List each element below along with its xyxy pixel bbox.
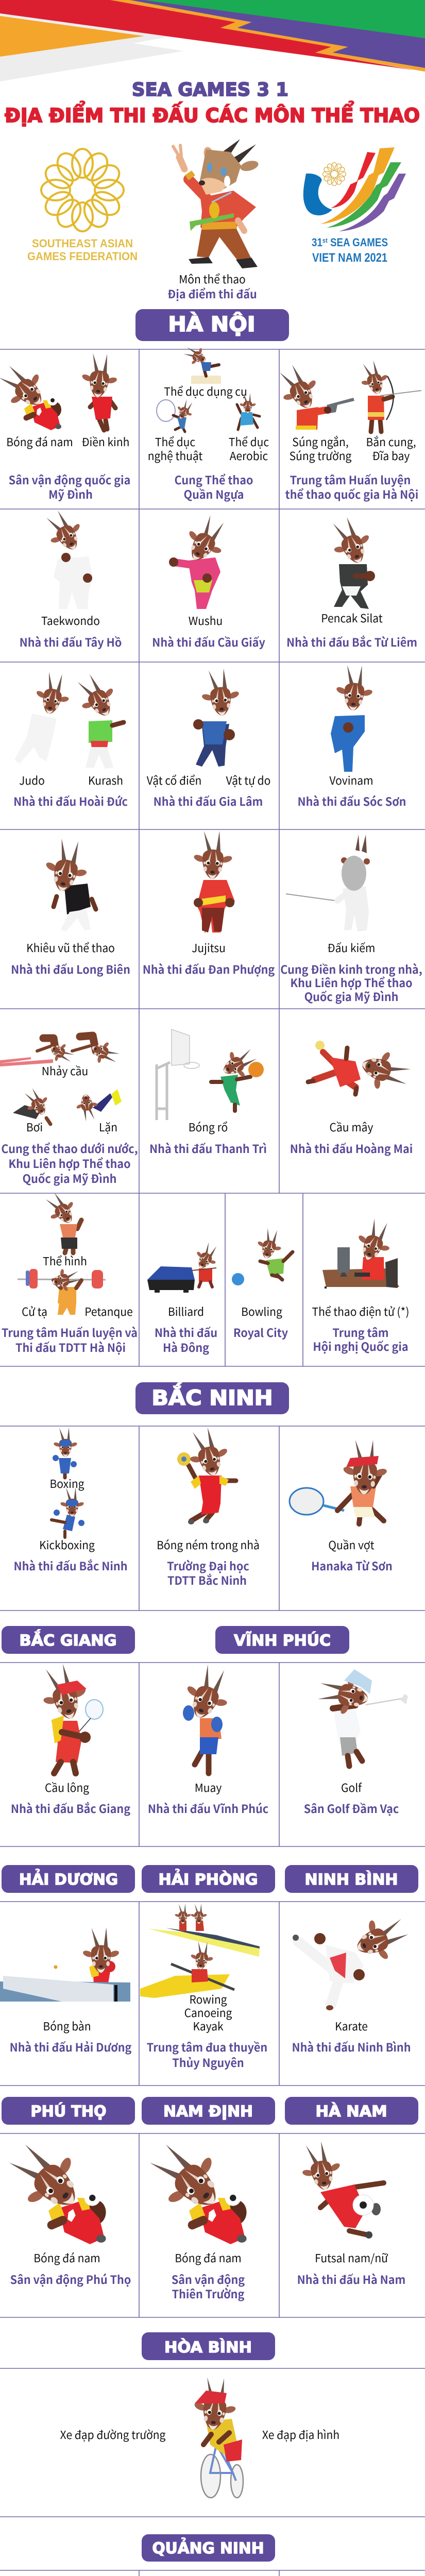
panel: Trung tâm Huấn luyện thể thao quốc gia Hà Nội bbox=[271, 358, 421, 502]
label: Jujitsu bbox=[192, 939, 226, 956]
mascot with legend bbox=[167, 139, 260, 302]
label: Bóng rổ bbox=[189, 1118, 228, 1135]
label: Xe đạp địa hình: Xe đạp địa hình bbox=[262, 2426, 339, 2443]
heading: Vĩnh Phúc: VĨNH PHÚC bbox=[234, 1632, 331, 1649]
panel: Hòa Bình cycling bbox=[60, 2376, 339, 2498]
logo: Southeast Asian Games Federation bbox=[27, 149, 138, 263]
venue: Hội nghị Quốc gia bbox=[313, 1338, 409, 1354]
label: Taekwondo bbox=[41, 612, 100, 629]
label: Thể dục nghệ thuật bbox=[148, 433, 202, 464]
panel: Nhà thi đấu Long Biên bbox=[11, 836, 130, 977]
logo: Southeast Asian Games Federation: GAMES FEDERATION bbox=[27, 250, 138, 263]
mascot with legend: Địa điểm thi đấu bbox=[167, 286, 257, 302]
label: Karate bbox=[335, 2018, 368, 2034]
label: Cầu mây bbox=[330, 1118, 373, 1135]
icon: underwater diving mascot bbox=[74, 1089, 122, 1123]
venue: Nhà thi đấu Cầu Giấy bbox=[152, 634, 265, 650]
venue: Nhà thi đấu Tây Hồ bbox=[20, 634, 122, 650]
panel: Nhà thi đấu Hoàng Mai bbox=[290, 1041, 415, 1157]
venue: Khu Liên hợp Thể thao bbox=[290, 975, 413, 991]
venue: Trường Đại học bbox=[167, 1558, 249, 1574]
label: Thể hình: Thể hình bbox=[43, 1252, 87, 1269]
label: Quần vợt bbox=[328, 1536, 375, 1553]
title: SEA GAMES 3 1 bbox=[132, 79, 288, 100]
label: Pencak Silat bbox=[321, 609, 383, 626]
venue: Nhà thi đấu Long Biên bbox=[11, 961, 130, 977]
label: Bắn cung, Đĩa bay: Bắn cung, bbox=[366, 433, 416, 450]
venue: Hà Đông bbox=[163, 1340, 209, 1355]
label: Billiard bbox=[168, 1303, 204, 1319]
icon: muay mascot bbox=[178, 1659, 239, 1773]
label: Thể dục dụng cụ: Thể dục dụng cụ bbox=[164, 383, 247, 399]
label: Bóng đá nam: Bóng đá nam bbox=[6, 433, 73, 450]
venue: Hanaka Từ Sơn bbox=[311, 1558, 393, 1574]
icon: pencak silat mascot bbox=[324, 512, 377, 609]
icon: kayak mascot bbox=[140, 1940, 234, 1998]
label: Golf bbox=[341, 1779, 362, 1795]
label: Nhảy cầu: Nhảy cầu bbox=[42, 1062, 88, 1079]
venue: Nhà thi đấu Gia Lâm bbox=[154, 793, 263, 809]
heading: Hà Nam: HÀ NAM bbox=[315, 2103, 387, 2120]
heading: Nam Định bbox=[142, 2097, 275, 2125]
panel: Nhà thi đấu Hà Nam bbox=[296, 2139, 405, 2287]
venue: Trung tâm Huấn luyện bbox=[290, 472, 411, 488]
venue: Cung Điền kinh trong nhà, bbox=[280, 961, 422, 977]
venue bbox=[1, 1141, 138, 1187]
venue: Sân vận động quốc gia bbox=[9, 472, 130, 488]
panel: Trung tâm Huấn luyện và Thi đấu TDTT Hà Nội bbox=[2, 1187, 138, 1355]
panel: Sân vận động Cẩm Phả bbox=[279, 2566, 413, 2576]
venue: Royal City bbox=[233, 1325, 288, 1341]
label: Judo: Judo bbox=[19, 772, 45, 788]
venue line 2: Mỹ Đình bbox=[48, 486, 93, 502]
venue: Thiên Trường bbox=[172, 2286, 244, 2302]
heading: Bắc Giang bbox=[2, 1626, 135, 1654]
label: Xe đạp đường trường: Xe đạp đường trường bbox=[60, 2426, 165, 2443]
venue: Nhà thi đấu Bắc Ninh bbox=[13, 1558, 128, 1574]
logo: 31st SEA Games: st bbox=[322, 236, 328, 244]
label: Lặn: Lặn bbox=[99, 1118, 117, 1135]
icon: esports mascot bbox=[322, 1215, 399, 1289]
label: Futsal nam/nữ bbox=[315, 2249, 388, 2266]
icon: kickboxing mascot bbox=[52, 1487, 84, 1537]
label: Bóng ném trong nhà bbox=[157, 1536, 260, 1553]
heading: Bắc Giang: BẮC GIANG bbox=[20, 1630, 116, 1649]
heading: Bắc Ninh bbox=[135, 1382, 289, 1414]
label: Thể thao điện tử (*) bbox=[312, 1303, 409, 1319]
icon: judo mascot bbox=[14, 669, 74, 764]
icon: fencing mascot bbox=[286, 835, 370, 931]
label: Boxing: Boxing bbox=[49, 1475, 84, 1492]
venue: Nhà thi đấu Bắc Từ Liêm bbox=[286, 634, 417, 650]
icon: rowing mascots bbox=[148, 1904, 260, 1957]
label: Muay bbox=[195, 1779, 222, 1795]
label: Rowing Canoeing Kayak: Kayak bbox=[193, 2018, 224, 2034]
icon: archery mascot bbox=[356, 358, 421, 432]
panel: Nhà thi đấu Hoài Đức bbox=[13, 668, 128, 809]
label: Cử tạ: Cử tạ bbox=[22, 1303, 47, 1319]
venue: Cung thể thao dưới nước, bbox=[1, 1141, 138, 1157]
heading: Hà Nam bbox=[285, 2097, 418, 2125]
venue: Nhà thi đấu Đan Phượng bbox=[143, 961, 275, 977]
icon: aerobic gymnastics mascot bbox=[237, 393, 260, 430]
label: Wushu bbox=[189, 612, 223, 629]
icon: vovinam mascot bbox=[331, 664, 376, 772]
icon: boxing mascot bbox=[53, 1427, 78, 1478]
venue bbox=[155, 1325, 217, 1355]
icon: futsal mascot bbox=[296, 2139, 384, 2239]
heading: Phú Thọ bbox=[2, 2097, 135, 2125]
icon: taekwondo mascot bbox=[39, 504, 93, 609]
heading: Vĩnh Phúc bbox=[215, 1626, 349, 1654]
label: Cầu lông bbox=[45, 1779, 89, 1795]
heading: Hà Nội: HÀ NỘI bbox=[168, 312, 256, 336]
label: Điền kinh: Điền kinh bbox=[82, 433, 129, 450]
icon: football mascot bbox=[139, 2128, 247, 2244]
icon: cycling mascot bbox=[191, 2376, 243, 2498]
panel: Nhà thi đấu Hà Đông bbox=[147, 1239, 224, 1355]
icon: football mascot bbox=[279, 2566, 384, 2576]
panel: Nhà thi đấu Cầu Giấy bbox=[152, 510, 265, 650]
heading: Nam Định: NAM ĐỊNH bbox=[163, 2103, 253, 2120]
panel: Trung tâm đua thuyền Thủy Nguyên bbox=[140, 1904, 267, 2071]
venue: Nhà thi đấu Hà Nam bbox=[297, 2272, 405, 2287]
label: Vật cổ điển: Vật cổ điển bbox=[147, 772, 201, 788]
label: Bóng bàn bbox=[43, 2018, 91, 2034]
label: Bơi: Bơi bbox=[26, 1118, 43, 1135]
panel: Nhà thi đấu Bắc Ninh bbox=[13, 1427, 128, 1574]
venue: Cung Thể thao bbox=[175, 472, 253, 488]
title: ĐỊA ĐIỂM THI ĐẤU CÁC MÔN THỂ THAO bbox=[5, 101, 420, 127]
venue: Nhà thi đấu Hoài Đức bbox=[13, 793, 128, 809]
panel: Sân Golf Đầm Vạc bbox=[304, 1669, 408, 1817]
label: Vovinam bbox=[329, 772, 373, 788]
label: Khiêu vũ thể thao bbox=[26, 939, 115, 956]
icon: wushu mascot bbox=[169, 510, 235, 609]
venue: Sân vận động Phú Thọ bbox=[10, 2272, 131, 2287]
panel: Hanaka Từ Sơn bbox=[290, 1438, 393, 1574]
icon: athletics mascot bbox=[79, 351, 121, 430]
heading: Ninh Bình: NINH BÌNH bbox=[305, 1871, 398, 1888]
venue bbox=[2, 1325, 138, 1355]
venue: Nhà thi đấu Thanh Trì bbox=[149, 1141, 267, 1157]
venue: TDTT Bắc Ninh bbox=[167, 1572, 247, 1588]
panel: Nhà thi đấu Bắc Từ Liêm bbox=[286, 512, 417, 650]
icon: diving mascots bbox=[0, 1036, 123, 1070]
panel: Nhà thi đấu Vĩnh Phúc bbox=[148, 1659, 268, 1817]
label: Rowing Canoeing Kayak bbox=[184, 1991, 232, 2034]
heading: Hòa Bình bbox=[142, 2332, 275, 2360]
panel: Nhà thi đấu Bắc Giang bbox=[11, 1659, 130, 1817]
label: Đấu kiếm bbox=[328, 939, 375, 956]
icon: football mascot bbox=[0, 2128, 106, 2244]
label: Bóng đá nam bbox=[33, 2249, 100, 2266]
venue: Khu Liên hợp Thể thao bbox=[8, 1156, 131, 1172]
label: Rowing Canoeing Kayak: Rowing bbox=[189, 1991, 227, 2007]
label: Petanque: Petanque bbox=[84, 1303, 133, 1319]
panel: Trung tâm Hội nghị Quốc gia bbox=[312, 1215, 409, 1354]
panel: Trường Đại học TDTT Bắc Ninh bbox=[157, 1424, 260, 1588]
icon: golf mascot bbox=[315, 1669, 408, 1766]
logo: 31st SEA Games: 31 bbox=[312, 236, 324, 249]
panel: Sân vận động Thiên Trường bbox=[139, 2128, 247, 2302]
logo: 31st SEA Games bbox=[303, 147, 406, 265]
heading: Hải Dương: HẢI DƯƠNG bbox=[19, 1869, 118, 1888]
label: Bắn cung, Đĩa bay: Đĩa bay bbox=[372, 447, 410, 464]
venue bbox=[147, 2039, 267, 2071]
icon: artistic gymnastics mascot bbox=[181, 342, 221, 384]
panel: Nhà thi đấu Gia Lâm bbox=[147, 667, 270, 809]
label: Vật tự do: Vật tự do bbox=[226, 772, 270, 788]
icon: karate mascot bbox=[293, 1909, 414, 2010]
logo: 31st SEA Games: VIET NAM 2021 bbox=[312, 251, 387, 265]
heading: Phú Thọ: PHÚ THỌ bbox=[31, 2103, 106, 2120]
label: Bowling bbox=[241, 1303, 282, 1319]
heading: Hà Nội bbox=[135, 309, 289, 341]
label: Thể dục Aerobic bbox=[229, 433, 269, 464]
heading: Hải Phòng bbox=[142, 1865, 275, 1893]
title bbox=[5, 79, 420, 127]
panel: Sân vận động Phú Thọ bbox=[0, 2128, 131, 2287]
panel: Cung Thể thao Quần Ngựa bbox=[148, 342, 269, 502]
label: Súng ngắn, Súng trường bbox=[290, 433, 351, 464]
venue: Trung tâm bbox=[332, 1325, 389, 1341]
venue: Nhà thi đấu Bắc Giang bbox=[11, 1801, 130, 1817]
heading: Hải Phòng: HẢI PHÒNG bbox=[159, 1869, 258, 1888]
venue: Thi đấu TDTT Hà Nội bbox=[15, 1340, 126, 1355]
panel: Nhà thi đấu Hải Dương bbox=[0, 1927, 131, 2055]
panel: Nhà thi đấu Đan Phượng bbox=[143, 830, 275, 977]
logo: Southeast Asian Games Federation: SOUTHEAST ASIAN bbox=[32, 237, 133, 250]
heading: Quảng Ninh bbox=[142, 2534, 275, 2562]
panel: Nhà thi đấu Tây Hồ bbox=[20, 504, 122, 650]
icon: kurash mascot bbox=[70, 668, 124, 769]
venue: Trung tâm đua thuyền bbox=[147, 2039, 267, 2055]
label: Súng ngắn, Súng trường: Súng ngắn, bbox=[292, 433, 349, 450]
panel: Sân vận động quốc gia Mỹ Đình bbox=[0, 351, 130, 502]
icon: table tennis mascot bbox=[0, 1927, 130, 2002]
venue: Nhà thi đấu Vĩnh Phúc bbox=[148, 1801, 268, 1817]
venue bbox=[167, 1558, 249, 1588]
icon: billiard mascot bbox=[147, 1239, 224, 1293]
icon: rhythmic gymnastics mascot bbox=[157, 397, 197, 432]
venue: Trung tâm Huấn luyện và bbox=[2, 1325, 138, 1341]
icon: sport dance mascot bbox=[40, 836, 96, 931]
panel: Royal City bbox=[232, 1226, 293, 1341]
label: Kurash: Kurash bbox=[88, 772, 123, 788]
heading: Quảng Ninh: QUẢNG NINH bbox=[152, 2538, 264, 2557]
icon: handball mascot bbox=[177, 1424, 236, 1524]
venue bbox=[175, 472, 253, 502]
panel: Nhà thi đấu Sóc Sơn bbox=[298, 664, 406, 809]
venue: Quần Ngựa bbox=[184, 486, 244, 502]
heading: Hải Dương bbox=[2, 1865, 135, 1893]
label: Rowing Canoeing Kayak: Canoeing bbox=[184, 2004, 232, 2021]
panel: Nhà thi đấu Ninh Bình bbox=[292, 1909, 414, 2055]
icon: bowling mascot bbox=[232, 1226, 293, 1285]
venue: Sân Golf Đầm Vạc bbox=[304, 1801, 399, 1817]
venue: Nhà thi đấu Hải Dương bbox=[10, 2039, 131, 2055]
top banner bbox=[0, 0, 425, 81]
label: Thể dục nghệ thuật: Thể dục bbox=[155, 433, 195, 450]
venue: Quốc gia Mỹ Đình bbox=[304, 989, 398, 1005]
icon: shooting mascot bbox=[271, 359, 354, 430]
venue bbox=[280, 961, 422, 1005]
panel: Cung thể thao dưới nước bbox=[0, 1036, 138, 1187]
label: Súng ngắn, Súng trường: Súng trường bbox=[290, 447, 351, 464]
label: Bắn cung, Đĩa bay bbox=[366, 433, 416, 464]
heading: Hòa Bình: HÒA BÌNH bbox=[164, 2338, 252, 2356]
mascot with legend: Môn thể thao bbox=[179, 270, 246, 287]
logo: 31st SEA Games: SEA GAMES bbox=[328, 236, 388, 249]
icon: badminton mascot bbox=[35, 1659, 103, 1773]
venue: Nhà thi đấu Ninh Bình bbox=[292, 2039, 411, 2055]
venue: thể thao quốc gia Hà Nội bbox=[285, 486, 418, 502]
panel: Nhà thi đấu Thanh Trì bbox=[149, 1029, 267, 1157]
icon: football mascot bbox=[0, 355, 61, 430]
label: Bóng đá nam bbox=[175, 2249, 242, 2266]
panel: Cung Điền kinh trong nhà bbox=[280, 835, 422, 1005]
icon: basketball mascot bbox=[157, 1029, 264, 1120]
venue bbox=[313, 1325, 409, 1354]
label: Kickboxing: Kickboxing bbox=[39, 1536, 95, 1553]
venue bbox=[285, 472, 418, 502]
venue: Thủy Nguyên bbox=[172, 2055, 244, 2071]
icon: bodybuilding mascot bbox=[40, 1187, 82, 1253]
venue: Nhà thi đấu bbox=[155, 1325, 217, 1341]
label: Thể dục Aerobic: Aerobic bbox=[230, 447, 268, 464]
icon: sepak takraw mascot bbox=[308, 1041, 415, 1098]
icon: tennis mascot bbox=[290, 1438, 389, 1524]
icon: wrestling mascot bbox=[193, 667, 242, 767]
venue: Sân vận động bbox=[172, 2272, 245, 2287]
venue: Nhà thi đấu Hoàng Mai bbox=[290, 1141, 413, 1157]
icon: swimming mascot bbox=[13, 1084, 54, 1124]
label: Thể dục nghệ thuật: nghệ thuật bbox=[148, 447, 202, 464]
heading: Ninh Bình bbox=[285, 1865, 418, 1893]
heading: Bắc Ninh: BẮC NINH bbox=[151, 1382, 273, 1410]
venue bbox=[172, 2272, 245, 2302]
label: Thể dục Aerobic: Thể dục bbox=[229, 433, 269, 450]
venue: Quốc gia Mỹ Đình bbox=[23, 1171, 116, 1187]
icon: weightlifting mascot bbox=[18, 1265, 106, 1315]
icon: jujitsu mascot bbox=[192, 830, 235, 934]
venue: Nhà thi đấu Sóc Sơn bbox=[298, 793, 406, 809]
